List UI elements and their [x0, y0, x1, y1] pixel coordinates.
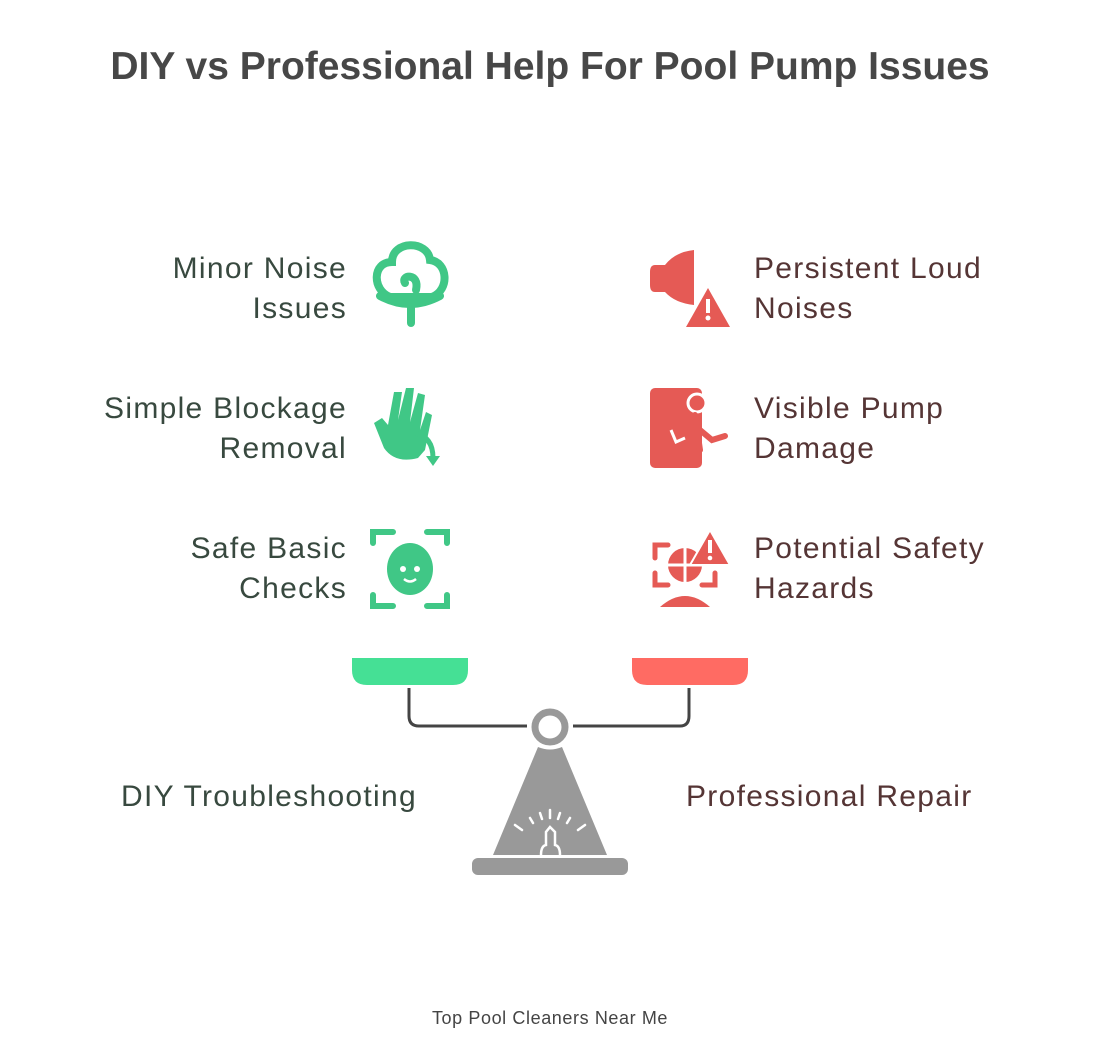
- icon: damaged pump: [650, 388, 725, 468]
- label: Potential Safety Hazards: Potential Safety: [754, 532, 985, 565]
- title: DIY vs Professional Help For Pool Pump Issues: [110, 45, 990, 88]
- label: Simple Blockage Removal: Simple Blockage: [104, 392, 347, 425]
- icon: safety hazard: [655, 530, 730, 607]
- label: Persistent Loud Noises: Noises: [754, 292, 854, 325]
- icon: face scan: [373, 532, 447, 606]
- label: Safe Basic Checks: [191, 532, 347, 605]
- label: Simple Blockage Removal: [104, 392, 347, 465]
- scale: [352, 658, 748, 875]
- label: Safe Basic Checks: Safe Basic: [191, 532, 347, 565]
- label: Persistent Loud Noises: [754, 252, 982, 325]
- icon: speaker warning: [650, 250, 730, 327]
- label: Minor Noise Issues: Minor Noise: [173, 252, 347, 285]
- label: Visible Pump Damage: Damage: [754, 432, 875, 465]
- label: DIY Troubleshooting: DIY Troubleshooting: [121, 780, 417, 813]
- label: Visible Pump Damage: [754, 392, 944, 465]
- label: Potential Safety Hazards: [754, 532, 985, 605]
- label: Persistent Loud Noises: Persistent Loud: [754, 252, 982, 285]
- label: Minor Noise Issues: Issues: [252, 292, 347, 325]
- icon: cloud noise: [377, 245, 445, 323]
- label: Potential Safety Hazards: Hazards: [754, 572, 875, 605]
- label: Safe Basic Checks: Checks: [239, 572, 347, 605]
- icon: hand: [374, 388, 440, 466]
- label: Simple Blockage Removal: Removal: [220, 432, 347, 465]
- footer: Top Pool Cleaners Near Me: [432, 1008, 668, 1028]
- label: Minor Noise Issues: [173, 252, 347, 325]
- label: Professional Repair: Professional Repair: [686, 780, 972, 813]
- label: Visible Pump Damage: Visible Pump: [754, 392, 944, 425]
